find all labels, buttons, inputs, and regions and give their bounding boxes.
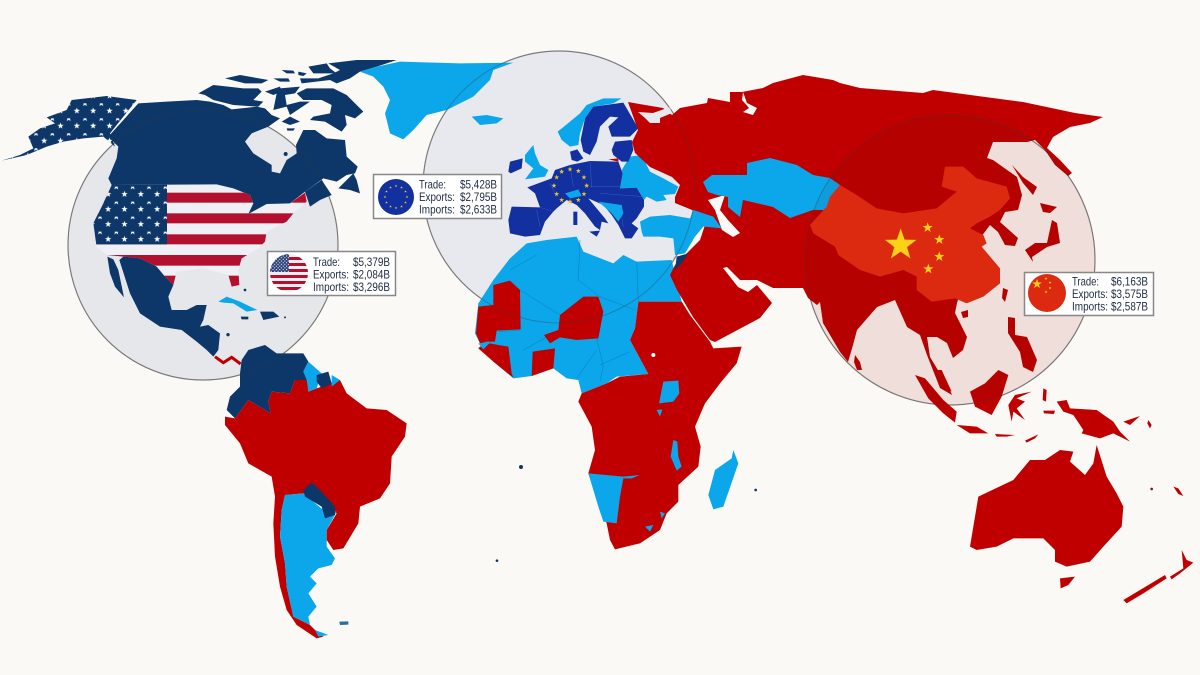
Philippines xyxy=(1008,317,1037,372)
Ellesmere Island xyxy=(300,60,397,83)
Switzerland xyxy=(565,189,582,198)
Norway xyxy=(558,98,622,147)
China figures: $2,587B xyxy=(1111,300,1148,314)
highlight circle: United States xyxy=(68,110,338,380)
region: Eurasia xyxy=(628,75,1103,395)
Southampton Island xyxy=(282,117,300,125)
Taiwan xyxy=(1002,288,1008,302)
Caribbean islands xyxy=(226,289,286,336)
country borders xyxy=(498,240,638,382)
callout: European Union trade xyxy=(374,174,502,218)
Borneo xyxy=(970,370,1008,415)
Timor xyxy=(1025,434,1038,443)
Lesotho xyxy=(645,525,653,532)
callout: China trade xyxy=(1024,272,1154,316)
Newfoundland xyxy=(338,173,360,193)
US figures: Exports: xyxy=(313,268,349,282)
China figures: Imports: xyxy=(1072,300,1108,314)
Niger xyxy=(544,297,603,343)
EU internal borders xyxy=(537,162,643,227)
Canada and Arctic islands xyxy=(108,60,397,214)
Cuba xyxy=(218,297,257,312)
region: Europe xyxy=(508,98,678,238)
Somerset and Boothia xyxy=(273,87,310,115)
Baffin Island xyxy=(297,88,363,132)
Balkans xyxy=(598,202,623,222)
EU figures: Exports: xyxy=(419,190,455,204)
Paraguay xyxy=(303,483,335,518)
callout: United States trade xyxy=(268,252,396,296)
China flag stars xyxy=(885,222,944,273)
French Guiana xyxy=(332,375,340,387)
Caspian Sea xyxy=(708,195,740,237)
icon: China flag xyxy=(1028,274,1066,312)
Ghana xyxy=(532,348,555,376)
EU member states xyxy=(508,103,644,238)
China figures: $6,163B xyxy=(1111,274,1148,288)
EU figures: Trade: xyxy=(419,178,446,192)
Argentina xyxy=(280,493,337,625)
Guinea-Bissau xyxy=(478,343,490,349)
US figures: Imports: xyxy=(313,280,349,294)
Kaliningrad xyxy=(608,158,618,162)
Sumatra xyxy=(915,375,957,423)
Madagascar xyxy=(708,450,738,509)
EU figures: $2,633B xyxy=(460,202,497,216)
region: Southeast Asia and Oceania xyxy=(915,370,1193,603)
Sri Lanka xyxy=(854,355,862,370)
icon: EU flag xyxy=(378,179,414,215)
Falkland Islands xyxy=(339,621,348,625)
Namibia xyxy=(588,473,640,523)
Rwanda xyxy=(657,409,662,417)
New Zealand xyxy=(1123,575,1167,603)
small islands xyxy=(496,465,757,562)
Hainan xyxy=(961,310,968,318)
Brazil, Peru, Bolivia, Chile in red xyxy=(225,380,407,638)
Malay Peninsula xyxy=(935,370,952,392)
highlight circle: European Union xyxy=(423,51,695,323)
US figures: $5,379B xyxy=(353,255,390,269)
region: Greenland and Iceland xyxy=(360,62,513,139)
US figures: $3,296B xyxy=(353,280,390,294)
EU figures: Imports: xyxy=(419,202,455,216)
China figures: $3,575B xyxy=(1111,287,1148,301)
Russia, Middle East, South and East Asia in red xyxy=(628,75,1103,395)
region: South America xyxy=(225,345,407,638)
US figures: Trade: xyxy=(313,255,340,269)
Kazakhstan and Central Asia xyxy=(703,158,840,218)
Turkey, Syria and Caucasus xyxy=(640,210,722,255)
Maluku xyxy=(1043,388,1047,402)
EU figures: $2,795B xyxy=(460,190,497,204)
Fiji and Pacific dots xyxy=(1173,487,1183,496)
Tierra del Fuego tip xyxy=(315,630,328,637)
Japan xyxy=(1012,165,1060,262)
Mexico and Central America xyxy=(107,257,220,357)
North and West Africa in light blue xyxy=(475,237,682,393)
Sulawesi xyxy=(1008,392,1032,422)
Alaska with stars xyxy=(2,96,137,161)
China xyxy=(810,167,1010,303)
United Kingdom xyxy=(525,145,548,179)
Tasmania xyxy=(1060,577,1075,588)
Queen Elizabeth Islands west xyxy=(225,75,268,83)
icon: US flag xyxy=(270,254,308,292)
Malawi xyxy=(671,440,682,471)
Israel and Jordan xyxy=(675,253,688,270)
Belarus, Ukraine, Moldova xyxy=(620,155,678,202)
Australia xyxy=(970,445,1123,567)
circle outlines and tint over land xyxy=(68,51,1095,405)
EU stars on map xyxy=(551,167,589,204)
Seram xyxy=(1043,411,1055,414)
Panama and Costa Rica xyxy=(215,357,241,364)
lake spot xyxy=(651,353,655,357)
Lesser Sunda Islands xyxy=(995,434,1015,437)
Guyana xyxy=(303,362,322,392)
Canada mainland xyxy=(108,100,358,214)
Hudson Bay island xyxy=(284,152,288,156)
China figures: Exports: xyxy=(1072,287,1108,301)
China figures: Trade: xyxy=(1072,274,1099,288)
Java xyxy=(957,425,988,433)
USA flag map xyxy=(90,182,313,290)
Greenland xyxy=(360,62,513,139)
Uganda xyxy=(659,381,679,403)
US figures xyxy=(313,255,390,294)
EU figures: $5,428B xyxy=(460,178,497,192)
Eswatini xyxy=(660,512,665,518)
Iceland xyxy=(472,115,503,125)
Mauritania, Mali west, Senegal xyxy=(476,281,521,343)
region: Africa xyxy=(475,237,757,562)
New Britain xyxy=(1123,416,1140,425)
US figures: $2,084B xyxy=(353,268,390,282)
Maritimes xyxy=(305,180,332,207)
New Guinea xyxy=(1057,400,1130,442)
highlight circle: China xyxy=(805,115,1095,405)
Guinea, Sierra Leone, Liberia xyxy=(478,343,513,378)
Central, East and Southern Africa xyxy=(578,302,742,549)
region: North America xyxy=(2,96,313,364)
Suriname xyxy=(317,372,332,388)
White Sea xyxy=(638,107,672,123)
Victoria and Banks Islands xyxy=(198,85,263,107)
China landmass xyxy=(810,167,1010,303)
Colombia, Venezuela, Ecuador xyxy=(227,345,308,418)
China figures xyxy=(1072,274,1148,314)
EU figures xyxy=(419,178,497,216)
Ob Gulf xyxy=(742,92,757,115)
